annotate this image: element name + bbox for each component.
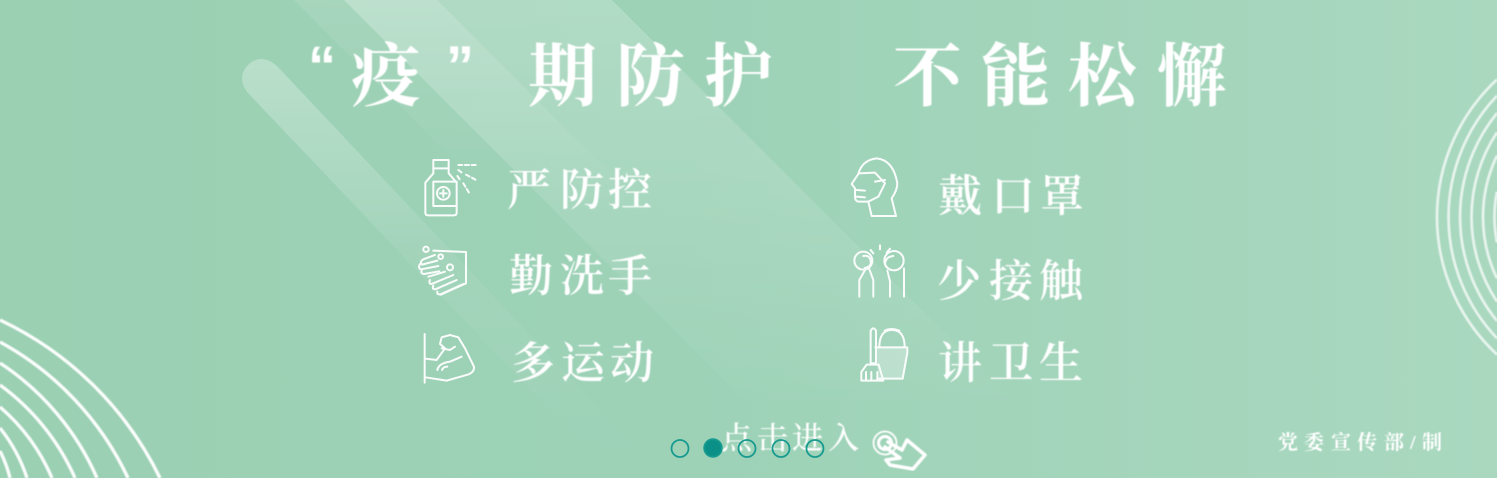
label: 少接触: 少接触 <box>937 257 1086 306</box>
icon: spray bottle <box>425 160 478 215</box>
label: 勤洗手: 勤洗手 <box>509 252 652 301</box>
icon: head with mask <box>852 158 897 216</box>
title quotes <box>308 34 474 97</box>
title quotes: “ <box>308 34 336 97</box>
title: 疫期防护不能松懈 <box>351 39 1226 115</box>
icon: washing hands <box>419 247 466 295</box>
icon: bucket and broom <box>861 328 907 381</box>
rings: right <box>1437 80 1497 354</box>
credit: 党委宣传部/制 <box>1278 430 1442 454</box>
label: 戴口罩: 戴口罩 <box>938 172 1084 221</box>
diagonal light stripes <box>242 0 1012 478</box>
button text: 点击进入 <box>721 421 859 456</box>
icon: tapping hand <box>874 432 925 469</box>
label: 讲卫生: 讲卫生 <box>938 339 1083 388</box>
title quotes: ” <box>446 34 474 97</box>
label: 严防控: 严防控 <box>507 166 652 215</box>
rings: bottom left <box>0 320 160 478</box>
icon: flexed arm <box>425 334 474 383</box>
carousel dots <box>672 439 824 457</box>
label: 多运动: 多运动 <box>511 339 654 388</box>
icon: fist bump <box>854 245 904 297</box>
